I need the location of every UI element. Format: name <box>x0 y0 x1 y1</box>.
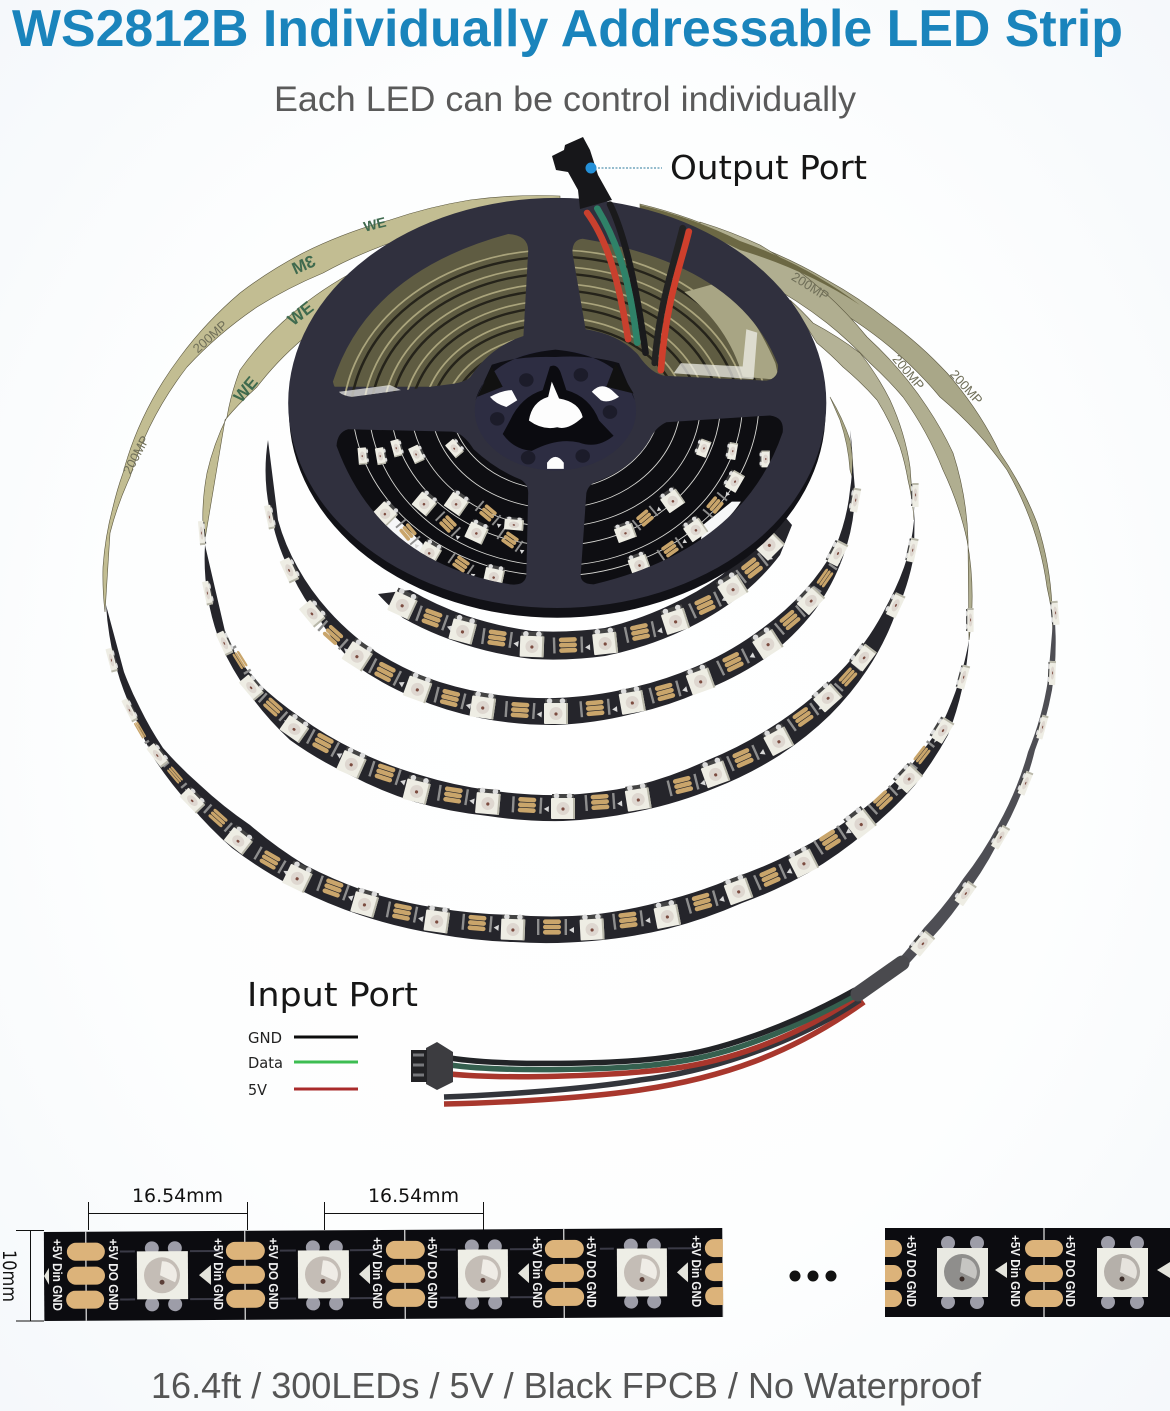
reel <box>288 137 826 618</box>
legend: GND: GND <box>248 1029 282 1047</box>
backing print: 200MP: 200MP <box>190 317 230 356</box>
LED strip coil <box>103 196 1060 970</box>
pad labels: +5V DO GND <box>584 1236 599 1308</box>
solder pads on strip <box>130 548 939 935</box>
output connector <box>552 137 612 209</box>
adhesive backing bands <box>103 196 1055 680</box>
right pad labels <box>904 1235 1078 1307</box>
right pad labels: +5V DO GND <box>904 1235 919 1307</box>
backing print: WE <box>284 298 317 330</box>
pad labels: +5V DO GND <box>425 1237 440 1309</box>
legend: 5V: 5V <box>248 1081 268 1099</box>
right pad labels: +5V Din GND <box>1008 1235 1023 1307</box>
close-up strip: right section <box>864 1228 1170 1317</box>
reel face <box>288 198 826 608</box>
title: WS2812B Individually Addressable LED Strip <box>12 0 1123 58</box>
dimension: pitch 2: 16.54mm <box>368 1185 459 1207</box>
input port label: Input Port <box>247 975 418 1014</box>
direction arrows <box>44 1262 688 1286</box>
reel hub <box>475 350 636 471</box>
cut line <box>1043 1228 1045 1317</box>
pad labels: +5V Din GND <box>50 1239 65 1311</box>
backing print: 200MP: 200MP <box>947 367 986 407</box>
backing print: 200MP: 200MP <box>889 352 927 393</box>
backing print: 3M <box>289 251 318 278</box>
dimension: pitch 1 <box>88 1185 248 1230</box>
dimension: strip width <box>0 1230 44 1321</box>
backing print: 200MP <box>120 269 986 477</box>
reel rim <box>289 204 826 618</box>
right LEDs <box>937 1236 1148 1309</box>
ellipsis dots <box>790 1270 836 1282</box>
pad labels: +5V Din GND <box>370 1237 385 1309</box>
pad labels <box>50 1235 704 1311</box>
input wires <box>444 990 864 1104</box>
strip: loop 1 <box>378 505 792 660</box>
output port label: Output Port <box>670 148 867 187</box>
pad labels: +5V DO GND <box>266 1238 281 1310</box>
backing print: WE <box>230 373 262 406</box>
pad labels: +5V Din GND <box>211 1238 226 1310</box>
strip: outer tail <box>898 610 1056 970</box>
subtitle: Each LED can be control individually <box>274 80 857 119</box>
dimension: pitch 2 <box>324 1185 484 1230</box>
copper traces <box>120 1248 695 1300</box>
dark top of backing <box>640 205 860 305</box>
right pad labels: +5V DO GND <box>1063 1235 1078 1307</box>
pad labels: +5V Din GND <box>689 1235 704 1307</box>
backing print: 200MP: 200MP <box>789 269 832 303</box>
heat-shrink sleeve <box>858 963 902 994</box>
input wires and connector <box>411 963 902 1104</box>
dimension: pitch 1: 16.54mm <box>132 1185 223 1207</box>
backing print: 200MP: 200MP <box>120 433 152 477</box>
legend: Data: Data <box>248 1054 283 1072</box>
lower windows showing LEDs <box>336 416 783 585</box>
output wires <box>587 204 689 371</box>
wire colour legend <box>248 1029 358 1099</box>
output marker dot <box>586 162 596 174</box>
backing print <box>230 214 388 406</box>
close-up strip: left section <box>44 1228 744 1321</box>
strip: loop 3 <box>205 490 915 821</box>
LEDs on strip <box>105 483 1060 957</box>
right arrows <box>995 1262 1170 1278</box>
solder pads <box>66 1239 744 1309</box>
close-up LEDs <box>137 1238 667 1311</box>
strip: loop 4 <box>106 605 969 943</box>
pad labels: +5V DO GND <box>106 1239 121 1311</box>
strip: loop 2 <box>266 430 855 725</box>
spec line: 16.4ft / 300LEDs / 5V / Black FPCB / No Waterproof <box>151 1365 982 1406</box>
pad labels: +5V Din GND <box>530 1236 545 1308</box>
segment cut lines <box>86 1228 723 1321</box>
backing print: WE <box>362 214 388 235</box>
upper windows showing backing <box>333 234 778 397</box>
right solder pads <box>885 1240 1063 1307</box>
output leader line <box>598 167 662 169</box>
input connector <box>411 1042 453 1090</box>
